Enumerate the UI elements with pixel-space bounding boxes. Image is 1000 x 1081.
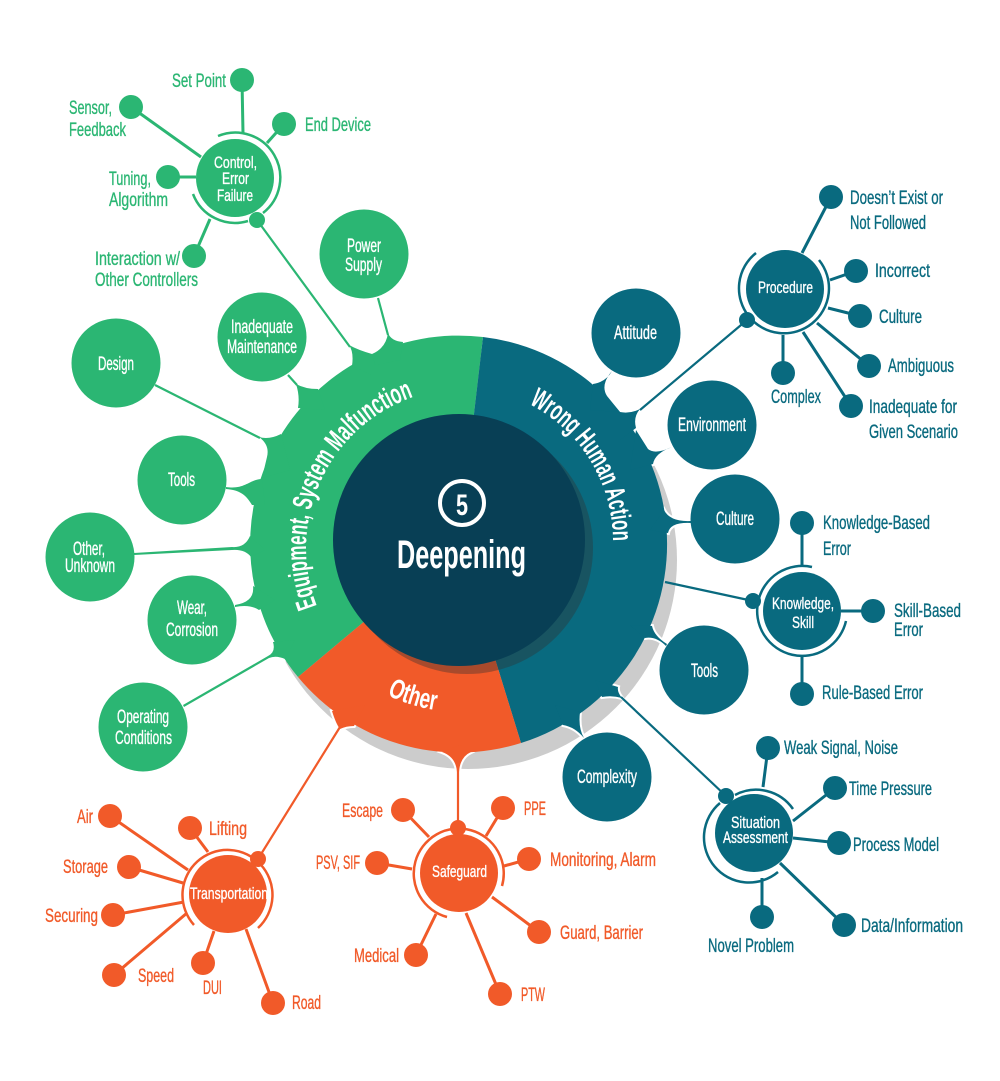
cluster: transportation: Speed (138, 966, 174, 987)
icon: number 5 badge: 5 (456, 489, 468, 522)
node: design (72, 318, 160, 408)
node: inadequate maintenance (218, 292, 306, 382)
segment: wrong human action (459, 337, 667, 743)
cluster: transportation: Road (292, 993, 321, 1014)
node: attitude (592, 288, 680, 378)
node: tools (human action) (660, 626, 748, 714)
cluster: safeguard (316, 796, 656, 1006)
cluster: transportation: Securing (45, 906, 98, 927)
cluster: knowledge, skill (745, 511, 961, 706)
cluster: safeguard: Medical (354, 946, 399, 967)
cluster: control, error failure: Tuning, (109, 169, 151, 190)
cluster: knowledge, skill: Error (823, 539, 851, 560)
node: power supply (320, 210, 408, 298)
cluster: procedure: Complex (771, 387, 821, 408)
panel: ring segments (250, 336, 667, 753)
connector halos (235, 409, 691, 772)
node: power supply: Power (347, 236, 381, 257)
hub: control: Control, (214, 153, 257, 172)
node: tools (equipment) (138, 436, 226, 524)
node: attitude: Attitude (614, 323, 657, 344)
ring drop shadow (259, 351, 677, 769)
hub: situation: Assessment (723, 828, 788, 847)
node: culture (690, 474, 780, 564)
cluster: procedure: Ambiguous (888, 356, 954, 377)
cluster: situation assessment: Time Pressure (849, 779, 932, 800)
heading: wrong human action: Wrong Human Action (532, 387, 632, 540)
cluster: procedure: Not Followed (850, 213, 926, 234)
cluster: control, error failure: Other Controllers (95, 270, 198, 291)
connectors: green stems (134, 220, 403, 707)
segment: equipment, system malfunction (250, 336, 483, 677)
node: complexity: Complexity (577, 767, 637, 788)
connectors: orange stems (258, 705, 471, 859)
cluster: situation assessment (704, 736, 963, 957)
cluster: control, error failure: Algorithm (109, 190, 168, 211)
cluster: situation assessment: Weak Signal, Noise (784, 738, 898, 759)
cluster: control, error failure: Feedback (69, 120, 126, 141)
cluster: transportation: Storage (63, 857, 108, 878)
cluster: situation assessment: Process Model (853, 835, 939, 856)
heading: other: Other (390, 680, 438, 710)
cluster: procedure: Culture (879, 307, 922, 328)
cluster: control, error failure: Set Point (172, 71, 227, 92)
cluster: procedure: Inadequate for (869, 397, 957, 418)
hub: transportation (189, 855, 268, 933)
cluster: knowledge, skill: Error (894, 620, 923, 641)
cluster: knowledge, skill: Knowledge-Based (823, 513, 930, 534)
hub: situation (715, 794, 793, 872)
cluster: situation assessment: Data/Information (861, 916, 963, 937)
segment: other (298, 542, 521, 753)
cluster: safeguard: PTW (521, 985, 545, 1006)
node: other, unknown: Other, (73, 539, 105, 560)
node: other, unknown (46, 512, 134, 602)
cluster: safeguard: Monitoring, Alarm (550, 850, 656, 871)
node: other, unknown: Unknown (65, 556, 115, 577)
connectors: teal stems (555, 320, 753, 796)
cluster: transportation: Lifting (209, 819, 247, 840)
node: complexity (562, 732, 652, 822)
node: wear, corrosion (148, 576, 236, 664)
title: Deepening (397, 533, 526, 577)
heading: equipment, system malfunction: Equipment, System Malfunction (288, 384, 412, 612)
cluster: safeguard: Escape (342, 801, 383, 822)
cluster: transportation: Air (77, 807, 93, 828)
node: inadequate maintenance: Inadequate (231, 317, 293, 338)
node: culture: Culture (716, 509, 754, 530)
hub: control (196, 139, 274, 217)
hub: safeguard: Safeguard (432, 862, 487, 881)
node: environment (668, 380, 756, 470)
cluster: transportation (45, 804, 321, 1015)
cluster: control, error failure (69, 68, 371, 291)
hub: procedure (746, 250, 824, 328)
icon: number 5 badge (440, 481, 484, 525)
hub: transportation: Transportation (190, 884, 268, 903)
center circle shadow (341, 422, 593, 674)
hub: control: Error (222, 169, 249, 188)
cluster: transportation: DUI (203, 978, 222, 999)
hub: knowledge (763, 572, 841, 650)
node: design: Design (98, 354, 134, 375)
cluster: procedure: Doesn’t Exist or (850, 188, 943, 209)
node: power supply: Supply (345, 255, 382, 276)
cluster: procedure: Incorrect (875, 261, 931, 282)
cluster: safeguard: Guard, Barrier (560, 923, 643, 944)
node: wear, corrosion: Wear, (177, 598, 207, 619)
node: tools (equipment): Tools (168, 470, 195, 491)
node: inadequate maintenance: Maintenance (227, 337, 297, 358)
node: environment: Environment (678, 415, 746, 436)
node: operating conditions: Conditions (115, 728, 172, 749)
hub: safeguard (420, 834, 498, 912)
hub: knowledge: Skill (792, 613, 814, 632)
panel: center circle (333, 414, 585, 666)
cluster: safeguard: PSV, SIF (316, 853, 360, 874)
cluster: control, error failure: Interaction w/ (95, 249, 181, 270)
cluster: knowledge, skill: Rule-Based Error (822, 683, 923, 704)
cluster: procedure (739, 185, 958, 443)
cluster: safeguard: PPE (524, 799, 546, 820)
node: wear, corrosion: Corrosion (166, 620, 218, 641)
hub: procedure: Procedure (758, 278, 813, 297)
hub: control: Failure (217, 186, 253, 205)
cluster: knowledge, skill: Skill-Based (894, 601, 961, 622)
cluster: control, error failure: End Device (305, 115, 371, 136)
cluster: procedure: Given Scenario (869, 422, 958, 443)
node: tools (human action): Tools (691, 661, 718, 682)
cluster: control, error failure: Sensor, (69, 98, 112, 119)
node: operating conditions: Operating (117, 707, 169, 728)
hub: situation: Situation (731, 813, 780, 832)
node: operating conditions (98, 682, 188, 772)
hub: knowledge: Knowledge, (772, 594, 834, 613)
cluster: situation assessment: Novel Problem (708, 936, 794, 957)
